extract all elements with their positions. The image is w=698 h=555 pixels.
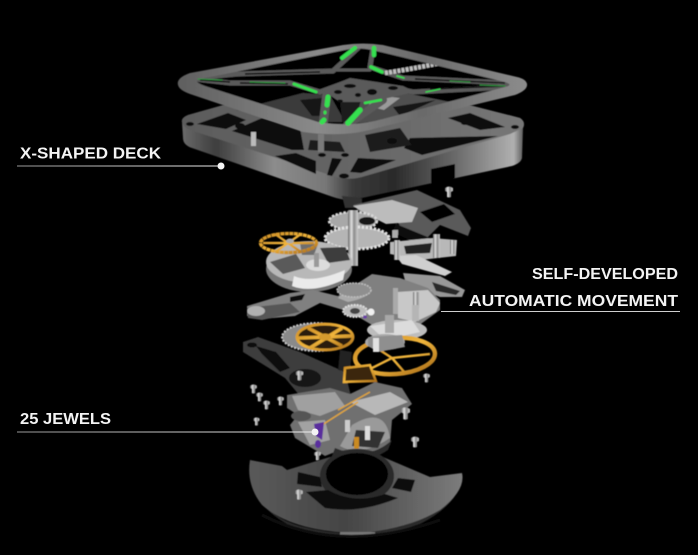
base outer shape: [249, 457, 463, 533]
X-shaped arms: [195, 48, 510, 125]
big silver barrel wheel: [266, 241, 352, 292]
lower deck posts: [251, 132, 256, 146]
label: self-developed automatic movement: SELF-DEVELOPED: [532, 266, 678, 283]
lower deck side wall: [182, 72, 524, 200]
loose screws: [250, 373, 430, 461]
base center ring: [320, 449, 394, 503]
arm shadow lines: [200, 72, 505, 89]
lower movement: [287, 382, 412, 461]
lower deck plate: [182, 72, 524, 200]
silver cluster over ring: [365, 305, 419, 352]
spindle stubs under deck: [342, 196, 362, 208]
lower deck top face: [182, 72, 524, 179]
gears behind top: [325, 210, 389, 266]
movement parts: [243, 186, 471, 461]
label: 25 jewels: 25 JEWELS: [20, 411, 111, 428]
base reflection: [262, 515, 440, 536]
small center gears: [343, 305, 427, 340]
gold balance ring: [344, 335, 436, 382]
base half-ring plate: [249, 449, 463, 536]
luminous green strips: [198, 48, 505, 123]
center hub: [322, 78, 415, 102]
top plate window dark fill: [197, 48, 509, 124]
long mainplate: [247, 274, 440, 326]
gold gear upper left: [260, 234, 316, 252]
upper right column parts: [390, 230, 465, 297]
lower deck screw holes: [186, 121, 519, 178]
bridge upper right: [353, 186, 471, 244]
lower plate seen through: [236, 93, 345, 122]
top plate frame: [178, 44, 527, 134]
label: X-shaped deck: [17, 146, 224, 170]
logo text band: [385, 62, 445, 73]
lower deck cut-outs: [197, 113, 505, 176]
label: self-developed automatic movement: AUTOMATIC MOVEMENT: [469, 293, 679, 310]
base bottom edge: [252, 478, 462, 536]
label: 25 jewels: [17, 411, 318, 436]
base screw: [295, 489, 303, 500]
label: X-shaped deck: X-SHAPED DECK: [20, 146, 162, 162]
base windows: [297, 472, 322, 487]
label: self-developed automatic movement: [441, 266, 680, 312]
lower dark bridge: [243, 337, 352, 400]
deck side notch: [431, 164, 455, 186]
gold gear center: [282, 323, 353, 351]
top deck plate: [178, 44, 527, 134]
